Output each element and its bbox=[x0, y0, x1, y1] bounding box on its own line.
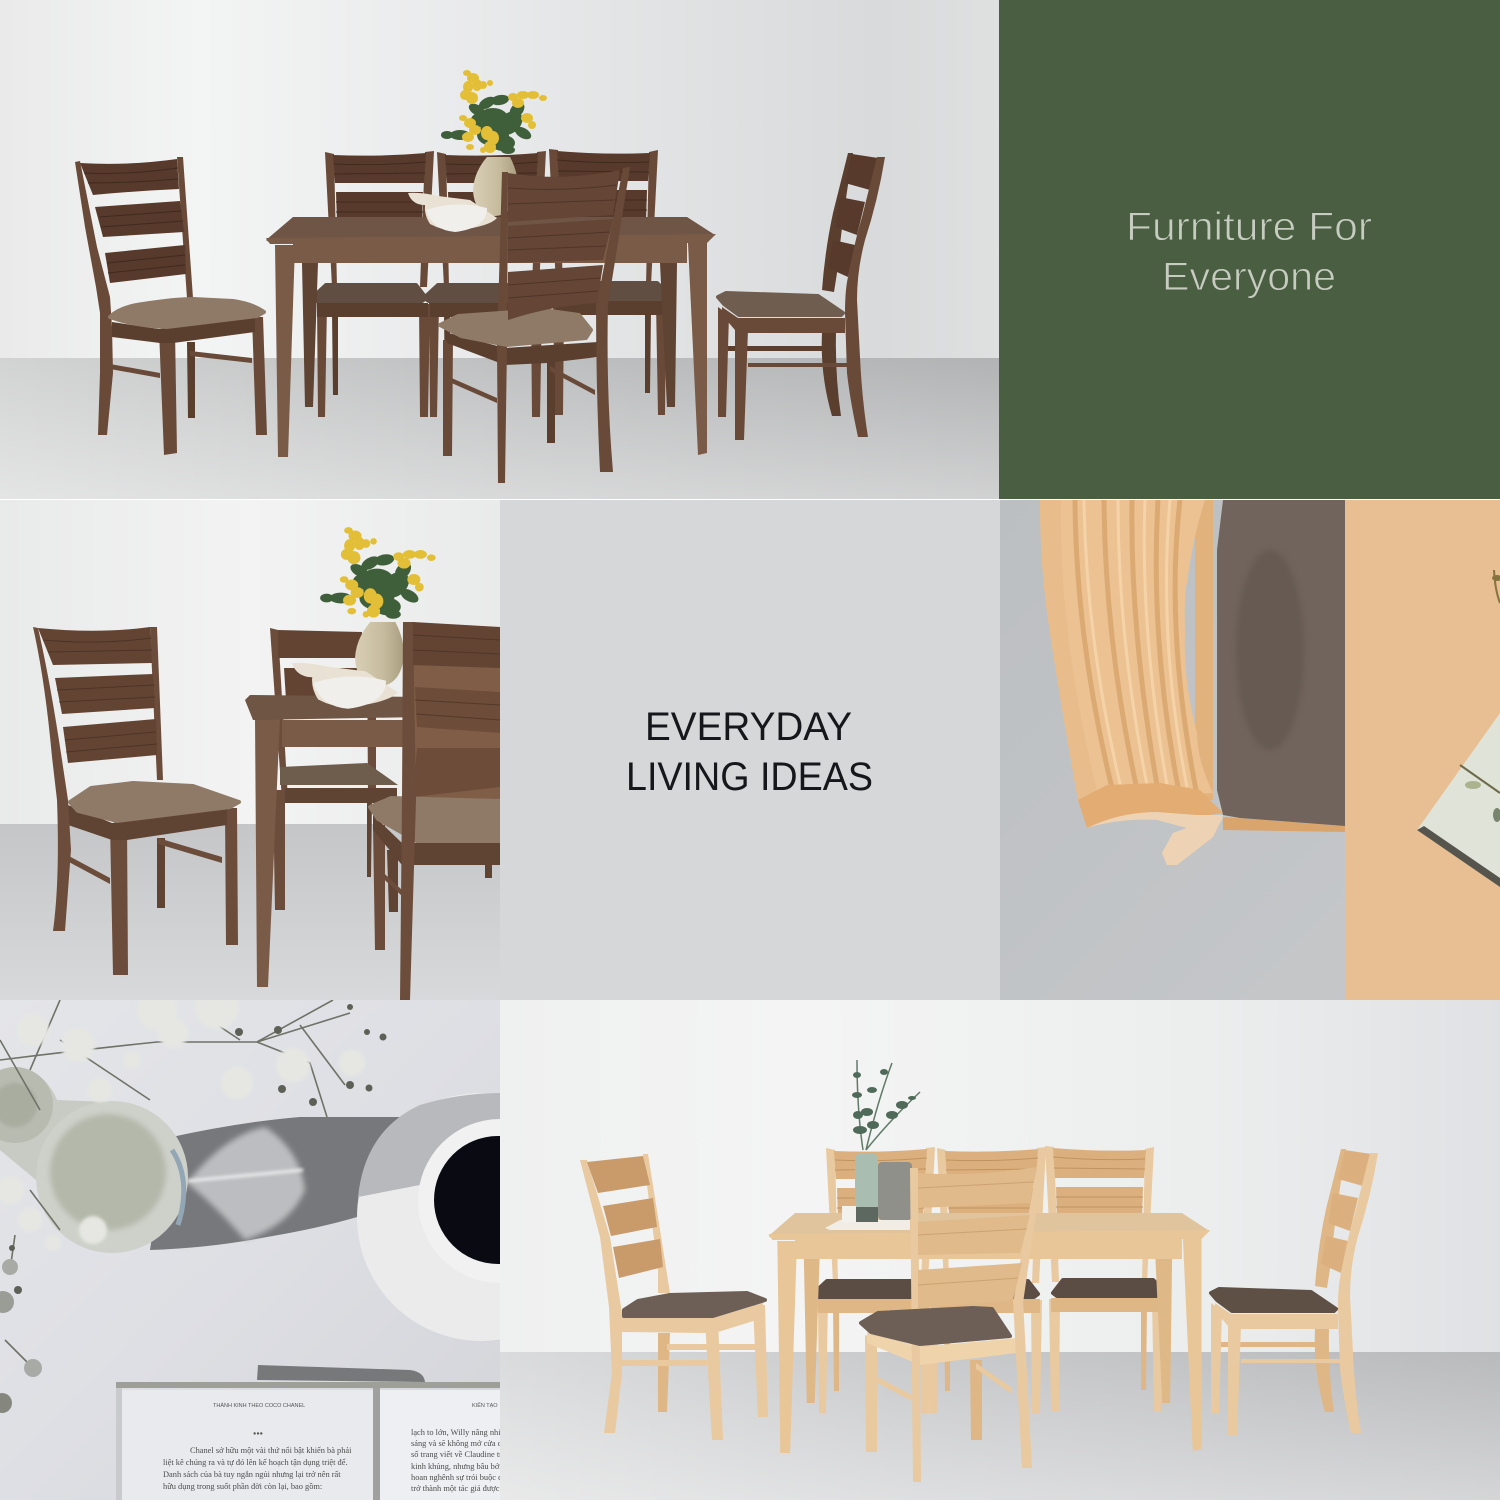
heading: Everyday Living Ideas: EVERYDAY bbox=[645, 705, 852, 749]
heading: Furniture For Everyone bbox=[1126, 205, 1372, 299]
heading: Everyday Living Ideas bbox=[626, 705, 873, 799]
bowl with napkin bbox=[292, 663, 398, 709]
vase with yellow flowers bbox=[320, 527, 436, 686]
panel: grey title block bbox=[500, 500, 1000, 1000]
book page text: hoan nghênh sự trói buộc đó bbox=[411, 1473, 506, 1482]
chair seat: brown fabric bbox=[1195, 500, 1345, 832]
panel: dark walnut dining set photo bbox=[0, 0, 999, 499]
heading: Furniture For Everyone: Furniture For bbox=[1126, 205, 1372, 249]
chair: far left light wood chair bbox=[580, 1154, 768, 1440]
table corner: walnut bbox=[245, 695, 403, 987]
chair: right side light wood chair bbox=[1211, 1149, 1378, 1436]
book page text: Chanel sở hữu một vài thứ nổi bật khiến bà phải bbox=[190, 1446, 352, 1455]
chairs: three back walnut chairs bbox=[312, 149, 671, 417]
gypsophila branches bbox=[0, 985, 386, 1413]
book page text: kinh khủng, nhưng bâu bởi cả bbox=[411, 1462, 511, 1471]
vase with yellow flowers bbox=[441, 70, 547, 216]
dining table: light wood bbox=[769, 1213, 1210, 1453]
book page text: KIẾN TẠO bbox=[472, 1402, 498, 1409]
book page text: ●●● bbox=[253, 1431, 263, 1437]
book page text: Danh sách của bà tuy ngắn ngủi nhưng lại trở nên rất bbox=[163, 1470, 341, 1479]
book page text: lạch to lớn, Willy nâng nhiều bbox=[411, 1428, 509, 1437]
glass vase bbox=[0, 1067, 188, 1253]
book page text: trở thành một tác giả được bbox=[411, 1484, 500, 1493]
panel: walnut chair close-up photo bbox=[0, 500, 500, 1000]
saucer and coffee cup bbox=[357, 1093, 500, 1341]
dining table: walnut bbox=[266, 217, 716, 457]
panel: green title block bbox=[999, 0, 1500, 499]
chair: right side walnut chair bbox=[718, 153, 885, 440]
book page text: THÀNH KINH THEO COCO CHANEL bbox=[213, 1402, 305, 1409]
chair: left walnut chair bbox=[33, 627, 239, 975]
book page text: sáng và sẽ không mở cửa cho bbox=[411, 1439, 510, 1448]
panel: top-down light wood chair detail bbox=[1000, 500, 1500, 1000]
chair: front walnut chair bbox=[440, 167, 630, 483]
shadow on cloth bbox=[150, 1117, 410, 1250]
chair: front light wood chair bbox=[861, 1165, 1043, 1482]
notebook with sprig bbox=[1417, 570, 1500, 887]
table top: light wood bbox=[1345, 500, 1500, 1000]
heading: Everyday Living Ideas: LIVING IDEAS bbox=[626, 755, 873, 799]
book page text bbox=[163, 1402, 515, 1493]
tray and glass vases with eucalyptus bbox=[825, 1060, 920, 1230]
chair: back chair behind table bbox=[270, 628, 398, 910]
open book bbox=[116, 1365, 515, 1500]
chair back: curved slats bbox=[1040, 500, 1223, 865]
chairs: three back light wood chairs bbox=[813, 1146, 1167, 1413]
bowl with napkin bbox=[408, 193, 497, 232]
heading: Furniture For Everyone: Everyone bbox=[1162, 255, 1336, 299]
chair: right cropped walnut chair bbox=[370, 622, 500, 1000]
panel: flatlay with vase, coffee and book bbox=[0, 1000, 500, 1500]
book page text: liệt kê chúng ra và tự đó lên kế hoạch tận dụng triệt để. bbox=[163, 1458, 348, 1467]
chair: far left walnut chair bbox=[75, 157, 267, 455]
book page text: số trang viết về Claudine trong bbox=[411, 1450, 515, 1459]
panel: light wood dining set photo bbox=[500, 1000, 1500, 1500]
book page text: hữu dụng trong suốt phần đời còn lại, bao gồm: bbox=[163, 1482, 322, 1491]
